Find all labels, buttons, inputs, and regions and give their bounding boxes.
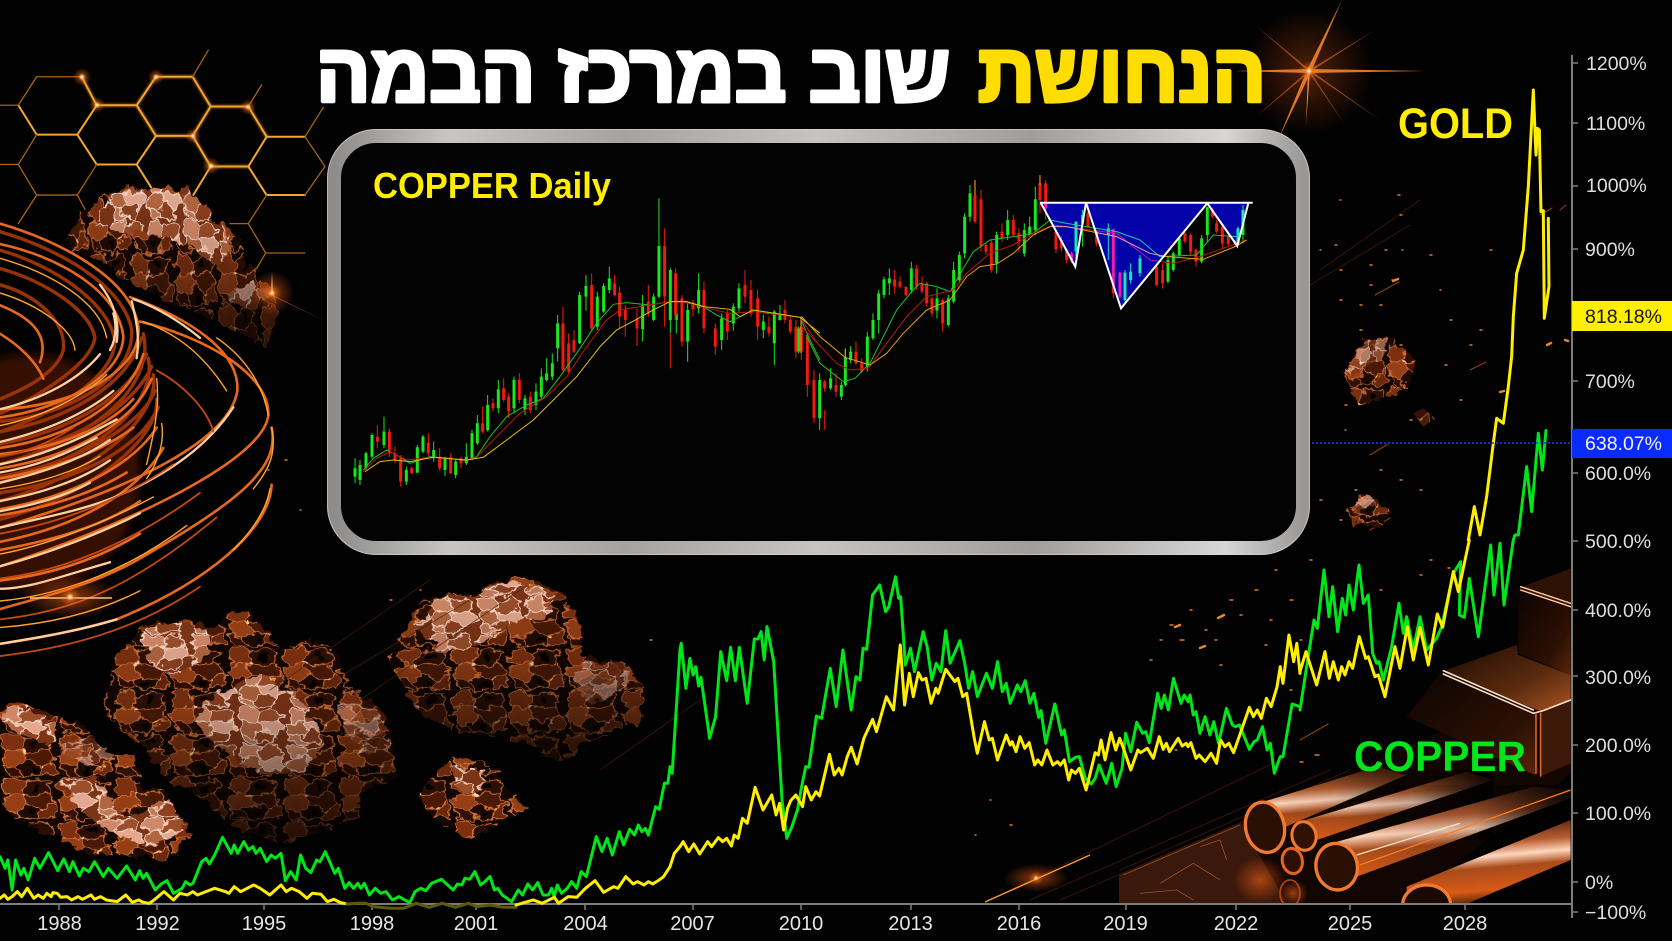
- icon: sparkle on nugget: [250, 271, 325, 321]
- y axis labels: 1000%: [1586, 175, 1647, 197]
- y axis labels: 200.0%: [1585, 735, 1651, 757]
- nugget: left cluster: [0, 702, 191, 860]
- y axis labels: −100%: [1585, 902, 1646, 924]
- candlestick chart: [355, 175, 1253, 487]
- x axis labels: 2028: [1443, 913, 1487, 935]
- nugget: small cluster: [419, 757, 525, 840]
- tube 3: [1312, 785, 1571, 894]
- x axis labels: 1988: [37, 913, 82, 935]
- copper bars and tubes: [1119, 568, 1572, 925]
- icon: sparkle star top: [1235, 0, 1425, 140]
- x axis labels: 2016: [997, 913, 1041, 935]
- ground plate: [1240, 674, 1571, 903]
- copper wire coil: [0, 224, 273, 656]
- nugget: centre cluster: [104, 612, 397, 843]
- inverse head and shoulders pattern: [1040, 203, 1253, 308]
- title: [316, 28, 1266, 119]
- label: GOLD: GOLD: [1398, 100, 1513, 148]
- gold value tag: 818.18%: [1585, 306, 1662, 328]
- y axis labels: 600.0%: [1585, 463, 1651, 485]
- tube 1: [1241, 767, 1407, 856]
- copper bar upper: [1518, 568, 1571, 675]
- x axis labels: 2004: [563, 913, 608, 935]
- x axis labels: 1998: [350, 913, 394, 935]
- x axis labels: 2019: [1103, 913, 1148, 935]
- copper nugget upper left: [65, 186, 280, 346]
- icon: sparkle on plate: [985, 855, 1090, 902]
- nugget: right cluster: [386, 577, 646, 763]
- dotted level line: [1312, 442, 1572, 444]
- moving averages right: [802, 220, 1247, 382]
- panel: copper daily chart frame: [328, 130, 1310, 554]
- x axis labels: 1995: [242, 913, 286, 935]
- copper value tag: [1572, 429, 1672, 458]
- y axis labels: 100.0%: [1585, 803, 1651, 825]
- x axis labels: 2022: [1214, 913, 1258, 935]
- y axis labels: 700%: [1585, 371, 1635, 393]
- x axis labels: [37, 913, 1487, 935]
- y axis labels: 900%: [1585, 239, 1635, 261]
- x axis labels: 2013: [888, 913, 933, 935]
- x axis labels: 2001: [454, 913, 498, 935]
- tube 4: [1401, 820, 1571, 903]
- honeycomb background: [0, 50, 325, 268]
- sparks and dust over the dark background: [268, 195, 1568, 900]
- icon: sparkle on coil: [20, 575, 120, 619]
- y axis labels: 500.0%: [1585, 531, 1651, 553]
- x axis labels: 2007: [670, 913, 715, 935]
- tube small: [1280, 847, 1305, 875]
- nugget: right low: [1347, 493, 1390, 530]
- y axis labels: [1585, 53, 1651, 924]
- x axis labels: 1992: [135, 913, 180, 935]
- gold value tag: [1572, 301, 1672, 331]
- title: שוב במרכז הבמה: [316, 28, 950, 119]
- x axis labels: 2025: [1328, 913, 1372, 935]
- candles right part: [801, 175, 1243, 430]
- moving averages left: [363, 302, 820, 472]
- candles left part: [355, 198, 801, 487]
- heading: COPPER Daily: COPPER Daily: [373, 165, 612, 206]
- copper performance line: [0, 431, 1546, 903]
- nugget: right large: [1343, 337, 1417, 407]
- y axis labels: 400.0%: [1585, 600, 1651, 622]
- y axis labels: 300.0%: [1585, 667, 1651, 689]
- nugget: right tiny: [1413, 408, 1435, 427]
- label: COPPER: COPPER: [1354, 733, 1526, 781]
- x axis labels: 2010: [779, 913, 823, 935]
- icon: honeycomb sparkles: [73, 68, 256, 175]
- y axis labels: 1100%: [1586, 113, 1645, 135]
- copper value tag: 638.07%: [1585, 433, 1662, 455]
- right side copper nuggets: [1343, 337, 1435, 530]
- lower left copper nuggets: [0, 577, 646, 860]
- copper bar middle: [1407, 645, 1571, 776]
- tube 2: [1289, 770, 1493, 852]
- title: הנחושת: [978, 28, 1266, 119]
- y axis labels: 1200%: [1586, 53, 1647, 75]
- y axis labels: 0%: [1585, 872, 1613, 894]
